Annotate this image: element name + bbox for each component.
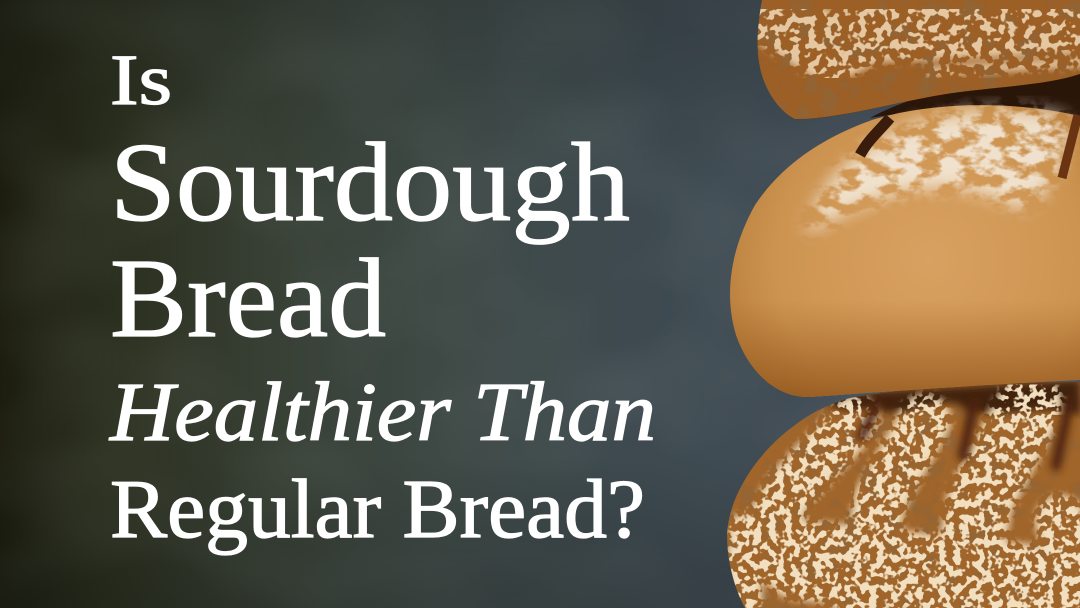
title line: Is: Is (110, 40, 172, 120)
title (109, 40, 656, 556)
flour dusting (798, 96, 1080, 238)
score marks (860, 118, 890, 155)
title line: Sourdough: Sourdough (110, 121, 630, 245)
title line: Regular Bread?: Regular Bread? (110, 463, 645, 556)
shadow between loaves (870, 72, 1080, 130)
title line: Healthier Than: Healthier Than (109, 366, 656, 459)
bread: top seeded loaf (750, 0, 1080, 125)
bread stack (720, 0, 1080, 608)
bread: middle plain loaf (720, 90, 1080, 397)
bread: bottom seeded loaf (720, 380, 1080, 608)
title line: Bread: Bread (110, 237, 386, 361)
